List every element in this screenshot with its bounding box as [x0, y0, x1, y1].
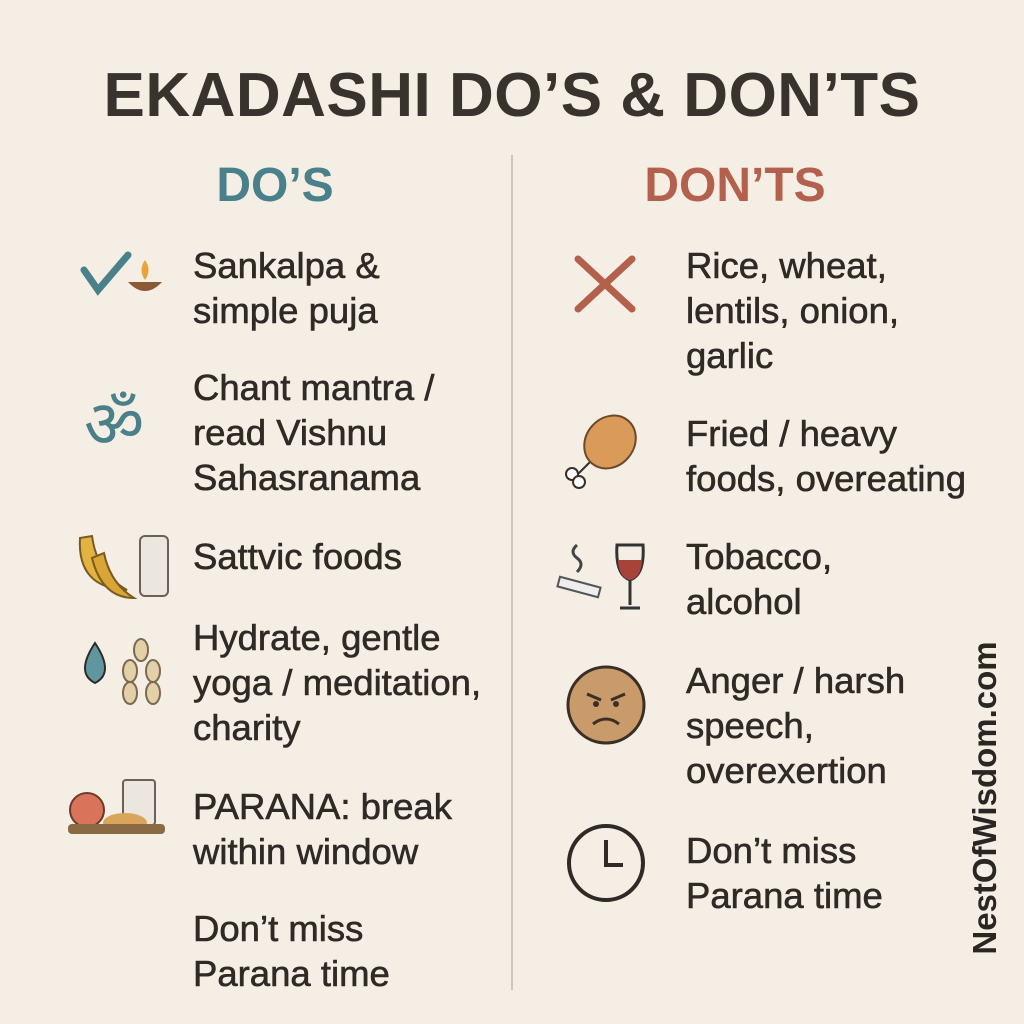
text: don't miss left: Parana time — [193, 953, 390, 994]
icon: parana food — [68, 779, 165, 834]
title: EKADASHI DO’S & DON’TS — [103, 61, 921, 130]
text: hydrate: Hydrate, gentle — [193, 617, 441, 658]
text: parana: PARANA: break — [193, 786, 452, 827]
text: tobacco — [686, 536, 832, 622]
text: sankalpa: simple puja — [193, 290, 378, 331]
text: tobacco: Tobacco, — [686, 536, 832, 577]
text: don't miss left: Don’t miss — [193, 908, 363, 949]
icon: cross — [574, 256, 636, 312]
icon: banana and milk — [78, 534, 169, 599]
text: anger — [686, 660, 905, 791]
text: don't miss right: Parana time — [686, 875, 883, 916]
text: fried: foods, overeating — [686, 458, 966, 499]
text: rice: garlic — [686, 335, 773, 376]
icon: clock — [567, 824, 645, 902]
heading: do's: DO’S — [216, 159, 334, 212]
text: parana: within window — [193, 831, 418, 872]
icon: om: ॐ — [84, 386, 144, 463]
text: hydrate: yoga / meditation, — [193, 662, 481, 703]
text: chant: read Vishnu — [193, 412, 387, 453]
icon: check and lamp — [80, 252, 162, 296]
icon: cigarette and wine — [556, 544, 645, 610]
text: rice: Rice, wheat, — [686, 245, 887, 286]
heading: don'ts: DON’TS — [644, 159, 826, 212]
text: sankalpa: Sankalpa & — [193, 245, 380, 286]
vertical watermark: NestOfWisdom.com — [966, 641, 1003, 955]
text: anger: Anger / harsh — [686, 660, 905, 701]
text: sattvic: Sattvic foods — [193, 536, 402, 577]
text: rice — [686, 245, 899, 376]
text: parana — [192, 786, 453, 872]
text: sankalpa — [193, 245, 380, 331]
text: chant: Chant mantra / — [193, 367, 434, 408]
text: don't miss left — [193, 908, 390, 994]
icon: water drop and grain — [84, 638, 161, 705]
text: anger: speech, — [686, 705, 814, 746]
text: tobacco: alcohol — [686, 581, 802, 622]
text: don't miss right: Don’t miss — [686, 830, 856, 871]
text: don't miss right — [686, 830, 883, 916]
text: fried — [686, 413, 966, 499]
text: anger: overexertion — [686, 750, 887, 791]
text: chant — [193, 367, 435, 498]
divider — [511, 155, 513, 990]
text: fried: Fried / heavy — [686, 413, 897, 454]
text: hydrate: charity — [193, 707, 301, 748]
icon: drumstick — [565, 414, 637, 489]
text: hydrate — [192, 617, 481, 748]
text: chant: Sahasranama — [193, 457, 420, 498]
icon: angry face — [566, 666, 646, 744]
text: rice: lentils, onion, — [686, 290, 899, 331]
